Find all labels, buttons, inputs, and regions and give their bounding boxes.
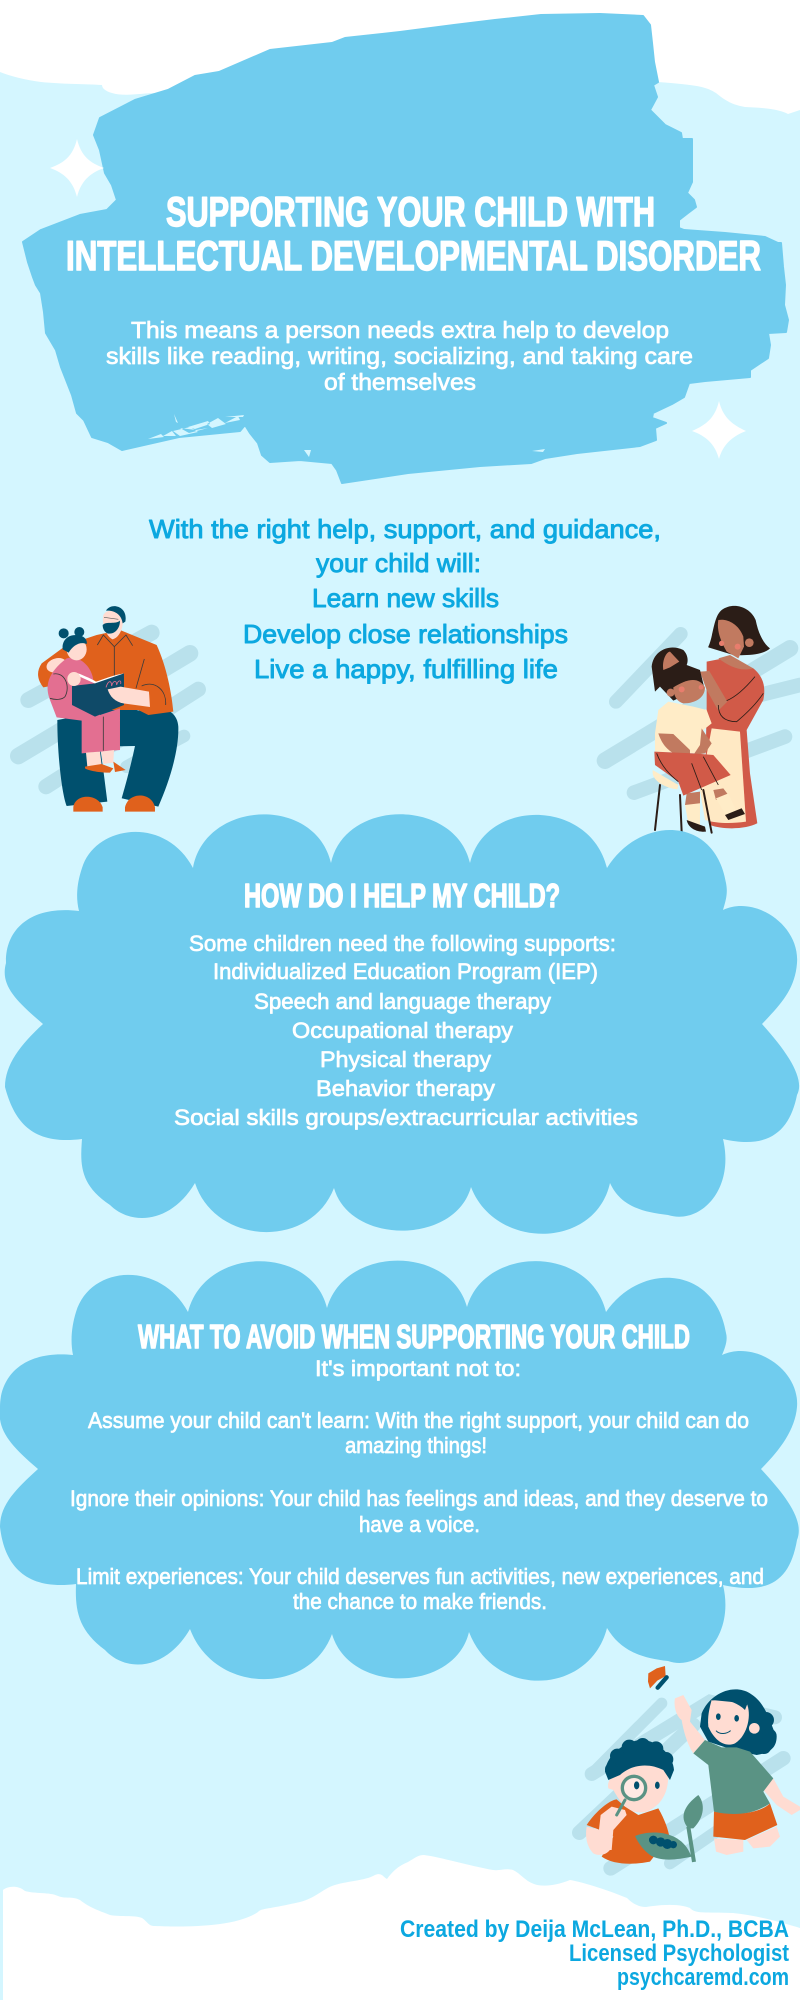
encouragement text block: Live a happy, fulfilling life — [254, 654, 558, 684]
encouragement text block: Learn new skills — [312, 583, 499, 613]
white paint band: top — [0, 0, 800, 114]
supports list: Occupational therapy — [292, 1018, 513, 1043]
icon: left sparkle — [50, 139, 104, 197]
supports list: Social skills groups/extracurricular activities — [174, 1105, 638, 1130]
supports list — [174, 931, 638, 1130]
avoid list: have a voice. — [359, 1512, 480, 1537]
illustration: mother combing daughter's hair — [605, 606, 800, 833]
illustration: children exploring with magnifier and butterfly — [579, 1666, 800, 1868]
avoid list: It's important not to: — [315, 1356, 521, 1381]
white paint band: bottom — [3, 1855, 800, 2000]
supports list: Behavior therapy — [316, 1076, 495, 1101]
cloud heading: HOW DO I HELP MY CHILD? — [244, 877, 560, 914]
credits text block — [400, 1916, 789, 1991]
definition text block: of themselves — [324, 369, 476, 395]
definition text block — [106, 317, 693, 395]
supports list: Speech and language therapy — [254, 989, 551, 1014]
avoid list — [70, 1356, 768, 1614]
icon: right sparkle — [692, 401, 746, 459]
supports list: Some children need the following supports: — [189, 931, 616, 956]
encouragement text block: Develop close relationships — [243, 619, 568, 649]
supports list: Individualized Education Program (IEP) — [213, 959, 598, 984]
avoid list: amazing things! — [345, 1433, 487, 1458]
avoid list: Assume your child can't learn: With the right support, your child can do — [88, 1408, 749, 1433]
illustration: father reading with daughter — [18, 606, 198, 812]
panel: how do I help my child cloud — [5, 814, 799, 1234]
panel: header paint blob — [23, 14, 788, 483]
encouragement text block — [149, 514, 661, 684]
paint fringe fragments — [148, 414, 545, 457]
panel: what to avoid cloud — [0, 1261, 799, 1681]
avoid list: Ignore their opinions: Your child has feelings and ideas, and they deserve to — [70, 1486, 768, 1511]
avoid list: the chance to make friends. — [293, 1589, 547, 1614]
encouragement text block: your child will: — [316, 548, 481, 578]
supports list: Physical therapy — [320, 1047, 491, 1072]
definition text block: skills like reading, writing, socializing, and taking care — [106, 343, 693, 369]
avoid list: Limit experiences: Your child deserves fun activities, new experiences, and — [76, 1564, 764, 1589]
title — [66, 188, 761, 279]
encouragement text block: With the right help, support, and guidance, — [149, 514, 661, 544]
definition text block: This means a person needs extra help to develop — [131, 317, 669, 343]
